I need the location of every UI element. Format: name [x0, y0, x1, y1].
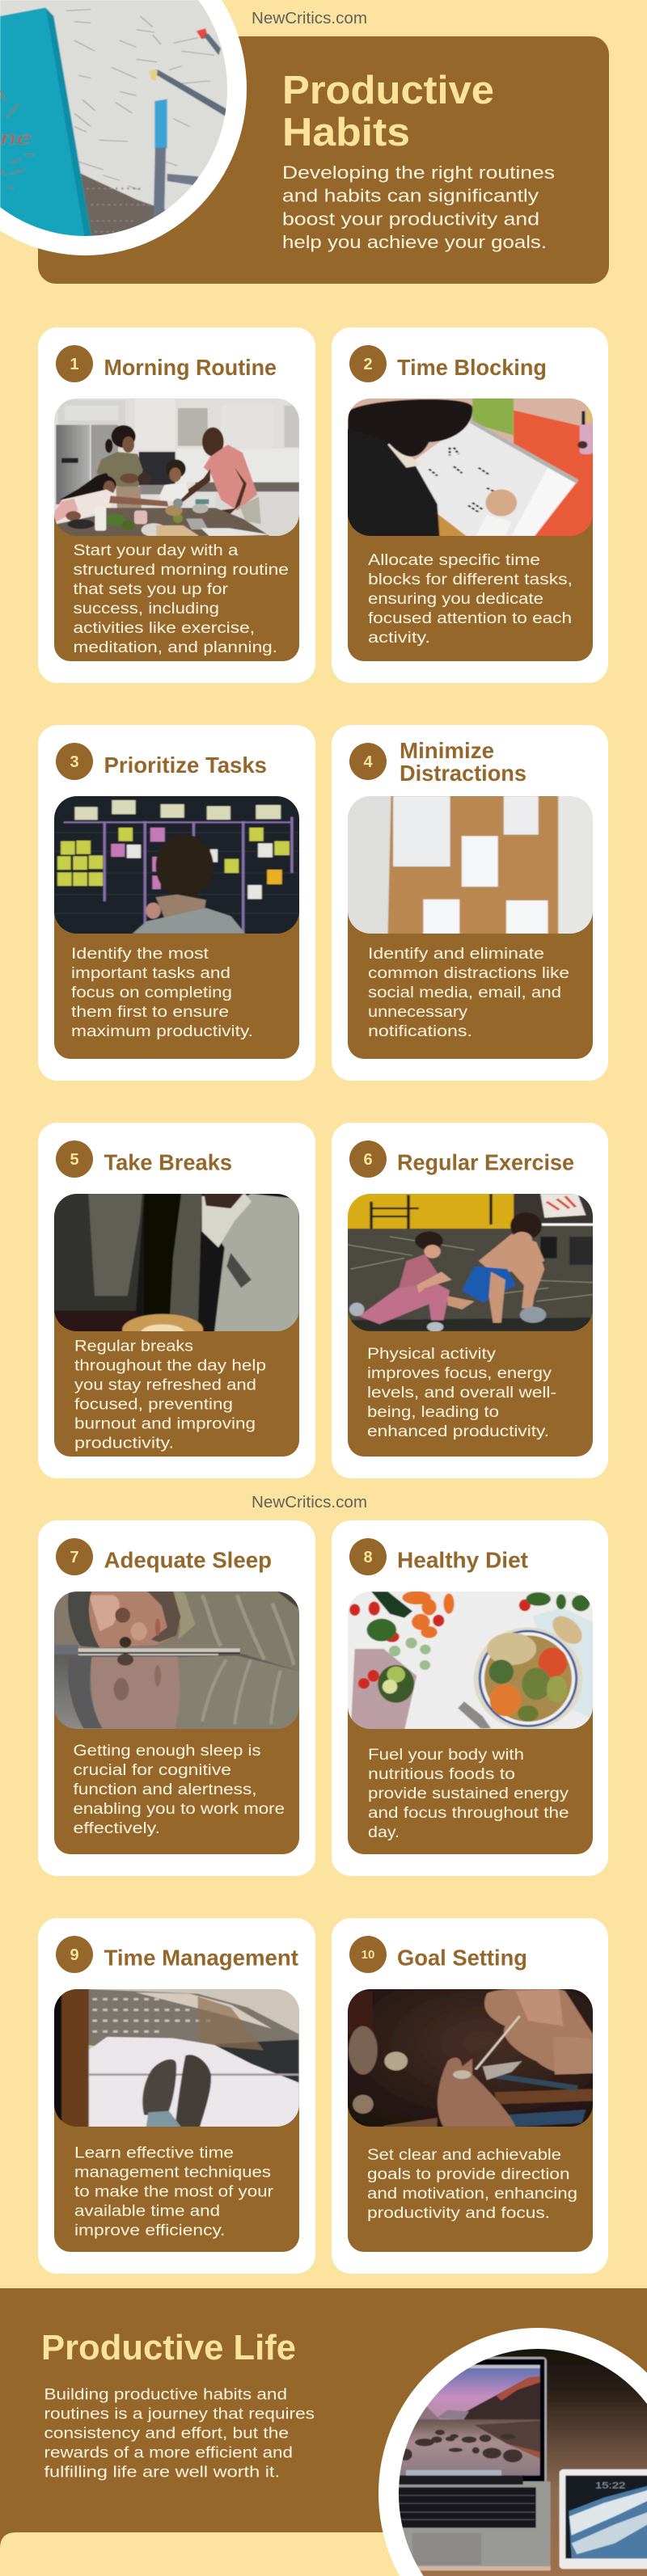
description text 1: meditation, and planning.: [73, 639, 277, 656]
description text 6: Physical activity: [367, 1346, 497, 1363]
description text 10: and motivation, enhancing: [367, 2186, 577, 2203]
intro text: [282, 162, 555, 252]
description text 9: available time and: [74, 2203, 220, 2220]
description text 3: [71, 946, 253, 1040]
description text 2: blocks for different tasks,: [368, 571, 573, 588]
description text 5: focused, preventing: [74, 1397, 233, 1413]
intro text: and habits can significantly: [282, 186, 539, 205]
description text 3: focus on completing: [71, 984, 232, 1001]
heading 2: Time Blocking: [397, 355, 547, 380]
description text 8: day.: [368, 1824, 400, 1841]
number badge 5: 5: [70, 1151, 79, 1169]
card 6: Regular Exercise: [332, 1123, 608, 1478]
description text 9: Learn effective time: [74, 2145, 234, 2161]
description text 1: Start your day with a: [73, 542, 239, 559]
photo: hands threading a needle: [342, 1986, 598, 2128]
photo: kanban wall: [49, 794, 305, 936]
description text 10: [367, 2147, 577, 2222]
description text 4: [368, 946, 569, 1040]
title: [282, 69, 494, 154]
description text 10: productivity and focus.: [367, 2205, 550, 2222]
description text 4: common distractions like: [368, 965, 569, 982]
description panel 2: [348, 473, 593, 661]
card 9: Time Management: [38, 1918, 315, 2274]
card 5: Take Breaks: [38, 1123, 315, 1478]
number badge 8: 8: [363, 1549, 373, 1566]
header circular photo: notebook and mind map: ne: [0, 125, 32, 150]
card 10: Goal Setting: [332, 1918, 608, 2274]
description text 1: activities like exercise,: [73, 620, 255, 637]
title: Productive: [282, 69, 494, 112]
description text 4: Identify and eliminate: [368, 946, 544, 963]
photo: healthy food on marble: [342, 1588, 598, 1731]
description panel 3: [54, 871, 299, 1059]
number badge 7: [56, 1538, 93, 1575]
photo: family in kitchen: [54, 398, 299, 536]
header circular photo: notebook and mind map: [0, 0, 247, 255]
number badge 1: [56, 345, 93, 382]
number badge 10: 10: [362, 1948, 374, 1962]
description panel 7: [54, 1666, 299, 1854]
description panel 4: [348, 871, 593, 1059]
description panel 6: [348, 1268, 593, 1457]
title: Habits: [282, 111, 410, 154]
description panel 10: [348, 2064, 593, 2252]
description text 10: goals to provide direction: [367, 2166, 569, 2183]
number badge 2: 2: [363, 356, 373, 373]
description text 5: you stay refreshed and: [74, 1377, 256, 1393]
card 2: Time Blocking: [332, 327, 608, 683]
heading 8: Healthy Diet: [397, 1547, 528, 1573]
card 3: Prioritize Tasks: [38, 725, 315, 1081]
intro text: boost your productivity and: [282, 209, 539, 229]
description text 8: [368, 1747, 569, 1841]
description panel 8: [348, 1666, 593, 1854]
number badge 10: [349, 1936, 387, 1973]
description text 1: success, including: [73, 601, 219, 618]
description text 4: unnecessary: [368, 1004, 468, 1021]
number badge 9: 9: [70, 1946, 79, 1964]
card 4: Minimize Distractions: [332, 725, 608, 1081]
watermark: top: NewCritics.com: [252, 10, 367, 27]
heading 9: Time Management: [104, 1945, 298, 1971]
description text 6: being, leading to: [367, 1404, 499, 1421]
number badge 9: [56, 1936, 93, 1973]
heading 4: Distractions: [400, 761, 526, 786]
intro text: Developing the right routines: [282, 162, 555, 183]
description panel 5: [54, 1268, 299, 1457]
description text 3: important tasks and: [71, 965, 230, 982]
number badge 7: 7: [70, 1549, 79, 1566]
header panel: [38, 36, 609, 284]
heading 7: Adequate Sleep: [104, 1547, 272, 1573]
number badge 2: [349, 345, 387, 382]
heading 10: Goal Setting: [397, 1945, 527, 1971]
card 7: Adequate Sleep: [38, 1520, 315, 1876]
photo: feet against a snowy mountain window: [49, 1986, 305, 2128]
photo: man asleep on reflective desk: [54, 1592, 299, 1729]
photo: coffee and suit: [54, 1194, 299, 1331]
number badge 1: 1: [70, 356, 79, 373]
photo: corkboard with blank notes: [342, 794, 598, 937]
description text 10: Set clear and achievable: [367, 2147, 561, 2164]
card 8: Healthy Diet: [332, 1520, 608, 1876]
description text 1: structured morning routine: [73, 562, 289, 579]
description text 2: ensuring you dedicate: [368, 591, 543, 608]
number badge 4: [349, 743, 387, 780]
number badge 5: [56, 1140, 93, 1178]
number badge 8: [349, 1538, 387, 1575]
description text 2: [368, 552, 573, 647]
description text 1: [73, 542, 289, 656]
description text 8: provide sustained energy: [368, 1785, 569, 1802]
description text 5: Regular breaks: [74, 1339, 193, 1355]
photo: writing on a planner: [342, 396, 598, 539]
description text 8: Fuel your body with: [368, 1747, 524, 1764]
watermark: middle: NewCritics.com: [252, 1494, 367, 1511]
description text 8: nutritious foods to: [368, 1766, 515, 1783]
description text 5: throughout the day help: [74, 1358, 266, 1374]
number badge 3: 3: [70, 753, 79, 771]
footer text: routines is a journey that requires: [44, 2405, 315, 2423]
number badge 4: 4: [363, 753, 373, 771]
description text 4: notifications.: [368, 1023, 472, 1040]
footer title: Productive Life: [41, 2329, 296, 2367]
heading 4: [400, 738, 526, 786]
footer text: consistency and effort, but the: [44, 2425, 289, 2443]
description text 7: effectively.: [73, 1820, 160, 1837]
heading 5: Take Breaks: [104, 1149, 232, 1175]
footer text: Building productive habits and: [44, 2386, 287, 2404]
description text 3: maximum productivity.: [71, 1023, 253, 1040]
description text 4: social media, email, and: [368, 984, 561, 1001]
card 1: Morning Routine: [38, 327, 315, 683]
photo: couple stretching in gym: [342, 1191, 598, 1334]
description panel 1: [54, 473, 299, 661]
heading 3: Prioritize Tasks: [104, 753, 267, 778]
number badge 3: [56, 743, 93, 780]
description text 2: activity.: [368, 630, 430, 647]
heading 6: Regular Exercise: [397, 1149, 574, 1175]
description text 9: [74, 2145, 274, 2239]
description text 3: them first to ensure: [71, 1004, 229, 1021]
description text 9: management techniques: [74, 2165, 271, 2181]
description text 3: Identify the most: [71, 946, 209, 963]
description text 7: [73, 1743, 285, 1837]
description text 9: to make the most of your: [74, 2184, 274, 2200]
description text 6: levels, and overall well-: [367, 1385, 556, 1402]
footer text: fulfilling life are well worth it.: [44, 2464, 280, 2481]
description text 1: that sets you up for: [73, 581, 229, 598]
description text 7: crucial for cognitive: [73, 1762, 231, 1779]
number badge 6: [349, 1140, 387, 1178]
heading 4: Minimize: [400, 738, 494, 763]
description text 6: enhanced productivity.: [367, 1423, 549, 1440]
description text 7: Getting enough sleep is: [73, 1743, 260, 1760]
description text 6: [367, 1346, 556, 1440]
footer text: [44, 2386, 315, 2481]
intro text: help you achieve your goals.: [282, 232, 547, 252]
description text 2: Allocate specific time: [368, 552, 540, 569]
footer circular photo: laptop and tablet: 15:22: [595, 2481, 625, 2491]
description text 5: productivity.: [74, 1436, 174, 1452]
description text 2: focused attention to each: [368, 610, 572, 627]
number badge 6: 6: [363, 1151, 373, 1169]
description text 8: and focus throughout the: [368, 1805, 569, 1822]
description text 5: [74, 1339, 266, 1452]
footer text: rewards of a more efficient and: [44, 2444, 293, 2462]
description text 9: improve efficiency.: [74, 2223, 225, 2239]
description text 7: enabling you to work more: [73, 1801, 285, 1818]
footer circular photo: laptop and tablet: [378, 2328, 647, 2576]
description panel 9: [54, 2064, 299, 2252]
heading 1: Morning Routine: [104, 355, 277, 380]
description text 6: improves focus, energy: [367, 1365, 552, 1382]
description text 5: burnout and improving: [74, 1416, 256, 1432]
footer band: [0, 2288, 647, 2576]
description text 7: function and alertness,: [73, 1781, 257, 1798]
